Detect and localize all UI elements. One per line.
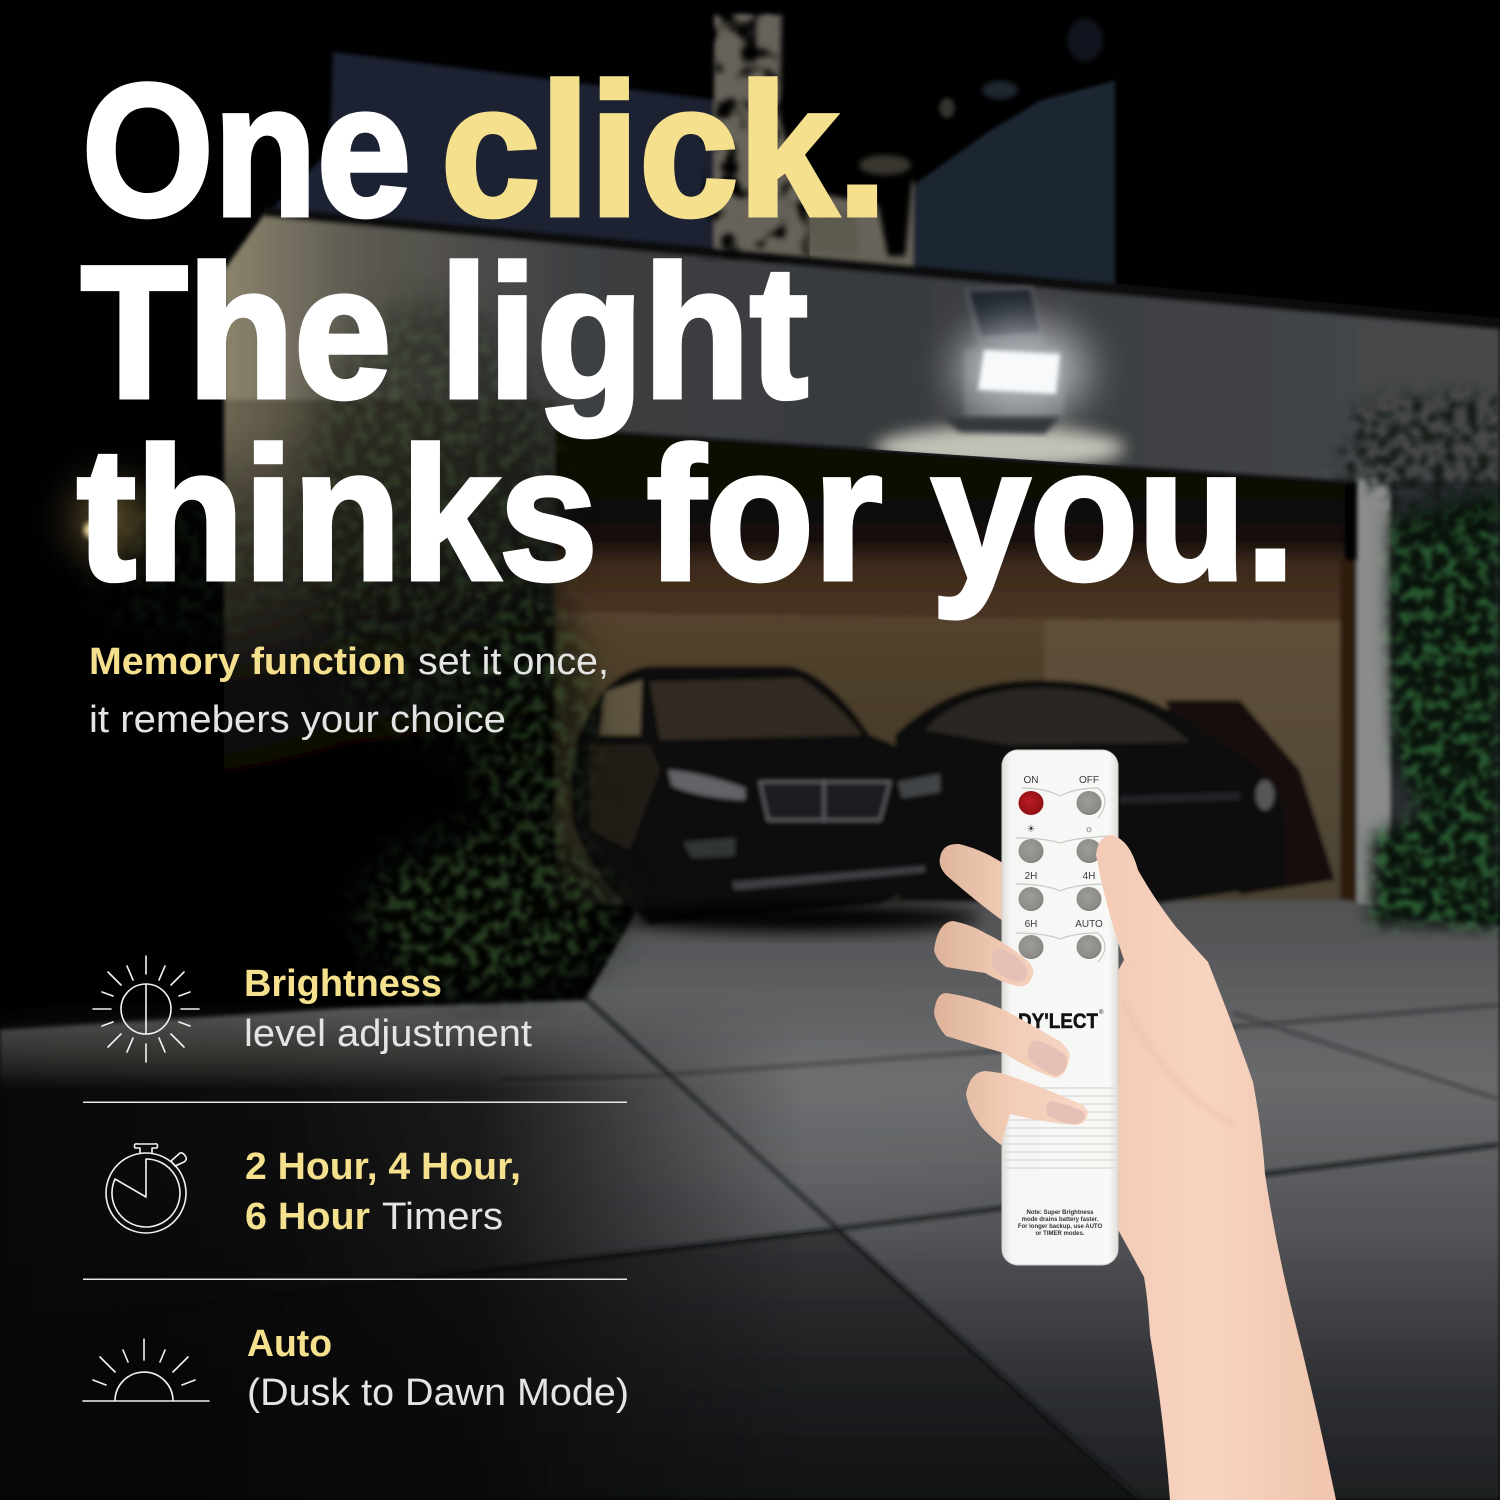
- fingernails: [992, 948, 1085, 1124]
- text: auto: Auto: [247, 1323, 332, 1365]
- button labels: ☀: [1027, 824, 1036, 835]
- subheading: memory function: set it once,: [418, 641, 609, 683]
- icon: sunrise: [83, 1339, 209, 1401]
- buttons: [1018, 791, 1102, 959]
- driveway joints: [503, 996, 1500, 1498]
- left car: [570, 666, 942, 925]
- feature: brightness: [93, 956, 532, 1062]
- note text: For longer backup, use AUTO: [1018, 1224, 1102, 1230]
- left lamp glow: [72, 482, 148, 558]
- right vines: [1359, 488, 1500, 939]
- text: timers: Timers: [382, 1196, 503, 1238]
- left lit wall: [224, 400, 555, 830]
- back car: [1165, 700, 1335, 895]
- text: brightness: Brightness: [244, 963, 442, 1005]
- button labels: 6H: [1025, 919, 1037, 930]
- headline: click.: [441, 45, 887, 255]
- subheading: memory function: it remebers your choice: [89, 699, 506, 741]
- pinky finger: [966, 1071, 1088, 1145]
- right car: [895, 680, 1285, 905]
- text: timers: [245, 1146, 521, 1238]
- dark front slab: [506, 1229, 1136, 1500]
- driveway sheen: [694, 1097, 803, 1196]
- house tree silhouette: [700, 0, 1115, 262]
- feature: auto: [83, 1323, 629, 1414]
- driveway: [0, 900, 1500, 1500]
- hand: palm and wrist behind remote: [940, 844, 1336, 1500]
- icon: half sun: [93, 956, 199, 1062]
- text: brightness: [244, 963, 532, 1055]
- car shadow: [620, 904, 980, 932]
- note text: mode drains battery faster.: [1022, 1217, 1099, 1223]
- remote control: [1002, 750, 1118, 1265]
- button labels: AUTO: [1075, 919, 1103, 930]
- button labels: [1024, 775, 1103, 930]
- button labels: 2H: [1025, 871, 1037, 882]
- thumb: [1096, 835, 1176, 985]
- headline: One: [82, 45, 411, 255]
- brand logo: DY'LECT: [1018, 1010, 1098, 1033]
- ring finger: [934, 993, 1070, 1078]
- note text: or TIMER modes.: [1035, 1231, 1085, 1237]
- button labels: ☼: [1084, 824, 1094, 835]
- brand logo: ®: [1099, 1009, 1104, 1016]
- posts: [1340, 560, 1358, 905]
- left foliage: [119, 290, 632, 1018]
- button labels: ON: [1024, 775, 1038, 786]
- text: auto: [247, 1323, 629, 1414]
- headline: thinks for you.: [77, 409, 1295, 619]
- middle finger: [934, 921, 1033, 986]
- button labels: OFF: [1079, 775, 1099, 786]
- subheading: memory function: [89, 641, 609, 741]
- text: timers: 2 Hour, 4 Hour,: [245, 1146, 521, 1188]
- ribbed grip: [1004, 1088, 1116, 1168]
- subheading: memory function: Memory function: [89, 641, 406, 683]
- headline: [77, 45, 1295, 619]
- text: brightness: level adjustment: [244, 1013, 532, 1055]
- note text: Note: Super Brightness: [1026, 1210, 1094, 1216]
- button grooves: [1016, 788, 1110, 962]
- floodlight: [875, 286, 1125, 470]
- garage fascia band: [224, 213, 1500, 492]
- text: auto: (Dusk to Dawn Mode): [247, 1372, 629, 1414]
- road edge glow: [0, 1029, 450, 1061]
- icon: stopwatch: [106, 1144, 186, 1233]
- note text: [1018, 1210, 1102, 1237]
- palm crease shading: [1122, 1000, 1235, 1125]
- text: timers: 6 Hour: [245, 1196, 370, 1238]
- feature: timers: [106, 1144, 521, 1238]
- right vines: sparse top leaves: [1334, 386, 1500, 531]
- button labels: 4H: [1083, 871, 1095, 882]
- headline: The light: [81, 227, 808, 437]
- index finger: [940, 844, 1010, 926]
- left dark gradient: [0, 1000, 800, 1500]
- wood soffit: [555, 430, 1345, 622]
- upper house walls: [265, 14, 1115, 290]
- garage interior: [555, 612, 1342, 905]
- hand: fingers in front of remote: [934, 835, 1176, 1145]
